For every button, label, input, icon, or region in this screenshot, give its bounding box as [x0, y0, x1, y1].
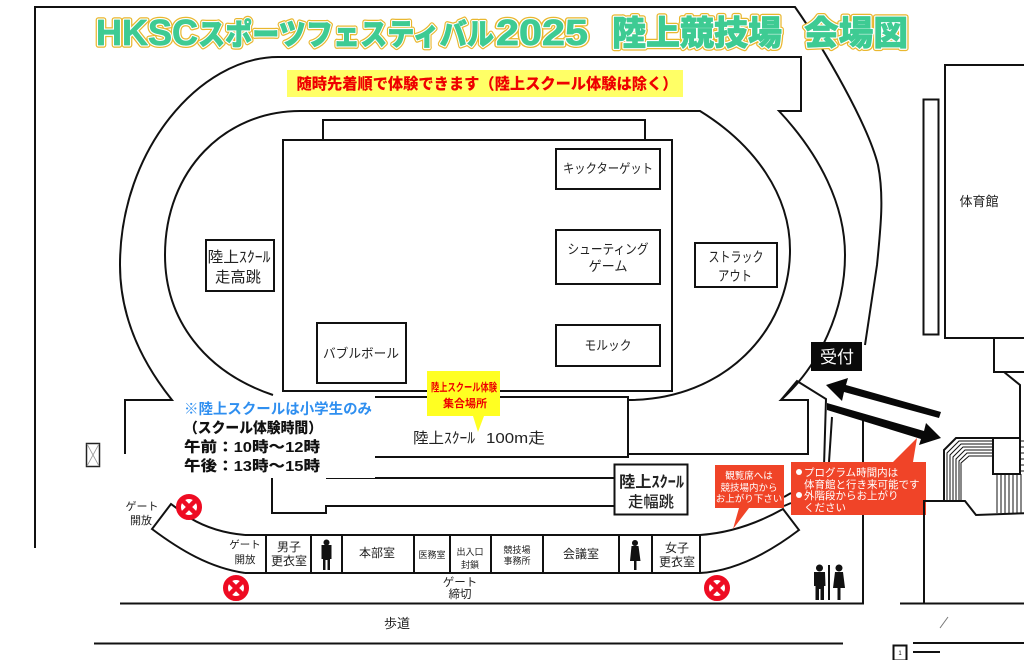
callout: spectator seats: お上がり下さい	[716, 493, 782, 505]
closed marker bottom-right	[706, 578, 728, 598]
site plan fragments bottom-right: 1	[898, 651, 902, 657]
label: sidewalk: 歩道	[384, 616, 410, 631]
station: shooting game: ゲーム	[588, 259, 628, 274]
callout: school meeting place: 陸上スクール体験	[431, 380, 497, 394]
title: スポーツフェスティバル	[198, 18, 494, 52]
room labels: 競技場	[503, 544, 531, 555]
callout: gymnasium access: 外階段からお上がり	[804, 489, 898, 502]
room labels: 出入口	[456, 546, 484, 557]
station: molkky: モルック	[584, 338, 632, 353]
station: long jump: 走幅跳	[628, 493, 674, 511]
station: struck out: アウト	[718, 268, 752, 284]
title: スポーツフェスティバル	[198, 18, 494, 52]
room labels: 更衣室	[659, 555, 695, 569]
notice: school times: （スクール体験時間）	[184, 419, 322, 437]
station: struck out: ストラック	[708, 249, 764, 265]
reception label	[811, 342, 862, 371]
callout: spectator seats	[715, 465, 784, 529]
station: kick target	[556, 149, 660, 189]
title: HKSC	[96, 12, 198, 53]
room labels	[229, 539, 695, 570]
callout: gymnasium access: ください	[804, 502, 846, 514]
sidewalk lines	[94, 604, 864, 644]
100m run lane	[375, 397, 628, 457]
title	[96, 12, 908, 53]
callout: school meeting place: 集合場所	[443, 396, 487, 410]
notice: first come banner: 随時先着順で体験できます（陸上スクール体験は除く）	[296, 74, 678, 93]
title: 2025	[496, 12, 588, 53]
labels: gates: 締切	[448, 587, 472, 601]
title: 陸上競技場	[612, 15, 782, 53]
labels: gates: 開放	[130, 513, 152, 527]
station: bubble ball	[317, 323, 406, 383]
label: gymnasium: 体育館	[959, 194, 999, 209]
title: 2025	[496, 12, 588, 53]
title: 陸上競技場	[612, 15, 782, 53]
callout: spectator seats: 観覧席へは	[725, 470, 773, 482]
station: long jump	[614, 464, 688, 514]
callout: gymnasium access: 体育館と行き来可能です	[804, 478, 920, 491]
station: struck out	[695, 243, 777, 287]
room labels: ゲート	[229, 539, 261, 551]
left stand wing	[152, 504, 245, 573]
notice: first come banner	[287, 70, 683, 97]
notice: school times: 午前：10時～12時	[184, 438, 321, 456]
room labels: 事務所	[503, 555, 531, 566]
room labels: 封鎖	[461, 559, 479, 570]
labels: gates	[126, 500, 477, 601]
station: high jump	[206, 240, 274, 291]
notice: school times: 午後：13時～15時	[184, 457, 321, 475]
icon: men's toilet in strip	[322, 540, 332, 570]
room labels: 開放	[234, 553, 256, 566]
room labels: 医務室	[418, 549, 446, 560]
gym lower structure	[900, 338, 1024, 604]
labels: gates: ゲート	[126, 500, 158, 513]
room labels: 本部室	[359, 546, 395, 560]
reception label: 受付	[820, 348, 854, 367]
station: bubble ball: バブルボール	[323, 346, 399, 361]
label: 100m run: 100m走	[486, 430, 545, 447]
title: 2025	[496, 12, 588, 53]
title: 会場図	[804, 15, 908, 53]
gymnasium building	[945, 65, 1024, 338]
external stairs	[947, 441, 1024, 513]
label: 100m run	[413, 430, 545, 447]
labels: gates: ゲート	[443, 576, 477, 589]
right stand wing	[700, 509, 799, 573]
title: スポーツフェスティバル	[198, 18, 494, 52]
room labels: 女子	[665, 541, 689, 555]
closed marker top-left	[178, 496, 200, 518]
running track inner line	[165, 111, 790, 400]
small equipment box	[86, 444, 100, 466]
site plan fragments bottom-right	[894, 617, 1024, 660]
callout: gymnasium access: プログラム時間内は	[804, 466, 898, 479]
narrow side building	[924, 100, 938, 334]
clubhouse strip of rooms	[229, 535, 700, 573]
title: 会場図	[804, 15, 908, 53]
station: molkky	[556, 325, 660, 366]
stand outer rail lines	[784, 493, 791, 506]
label: 100m run: 陸上ｽｸｰﾙ	[413, 430, 476, 447]
callout: school meeting place	[427, 371, 500, 432]
room labels: 男子	[277, 540, 301, 554]
station: kick target: キックターゲット	[563, 161, 653, 176]
title: HKSC	[96, 12, 198, 53]
station: high jump: 走高跳	[215, 269, 261, 286]
title: HKSC	[96, 12, 198, 53]
arrow: leftward	[826, 378, 941, 418]
long jump lane	[272, 478, 614, 513]
field rectangle	[283, 140, 672, 391]
station: long jump: 陸上ｽｸｰﾙ	[619, 473, 684, 491]
station: high jump: 陸上ｽｸｰﾙ	[208, 249, 271, 266]
stairs outer edge	[944, 438, 993, 501]
top bar of field	[323, 120, 645, 140]
icon: women's toilet in strip	[630, 540, 640, 570]
running track outer line	[120, 57, 845, 454]
stand stair lines by entrance	[781, 381, 863, 603]
callout: spectator seats: 競技場内から	[720, 482, 778, 494]
notice: school times: ※陸上スクールは小学生のみ	[184, 400, 372, 418]
closed marker bottom-left	[226, 578, 246, 598]
notice: school times	[180, 400, 375, 478]
station: shooting game	[556, 230, 660, 284]
title: 会場図	[804, 15, 908, 53]
room labels: 会議室	[563, 547, 599, 561]
title: 陸上競技場	[612, 15, 782, 53]
icon: toilets	[814, 564, 845, 600]
room labels: 更衣室	[271, 554, 307, 568]
stadium outer boundary	[35, 7, 881, 548]
arrow: rightward	[827, 403, 941, 445]
station: shooting game: シューティング	[568, 242, 648, 257]
callout: gymnasium access	[791, 438, 926, 515]
